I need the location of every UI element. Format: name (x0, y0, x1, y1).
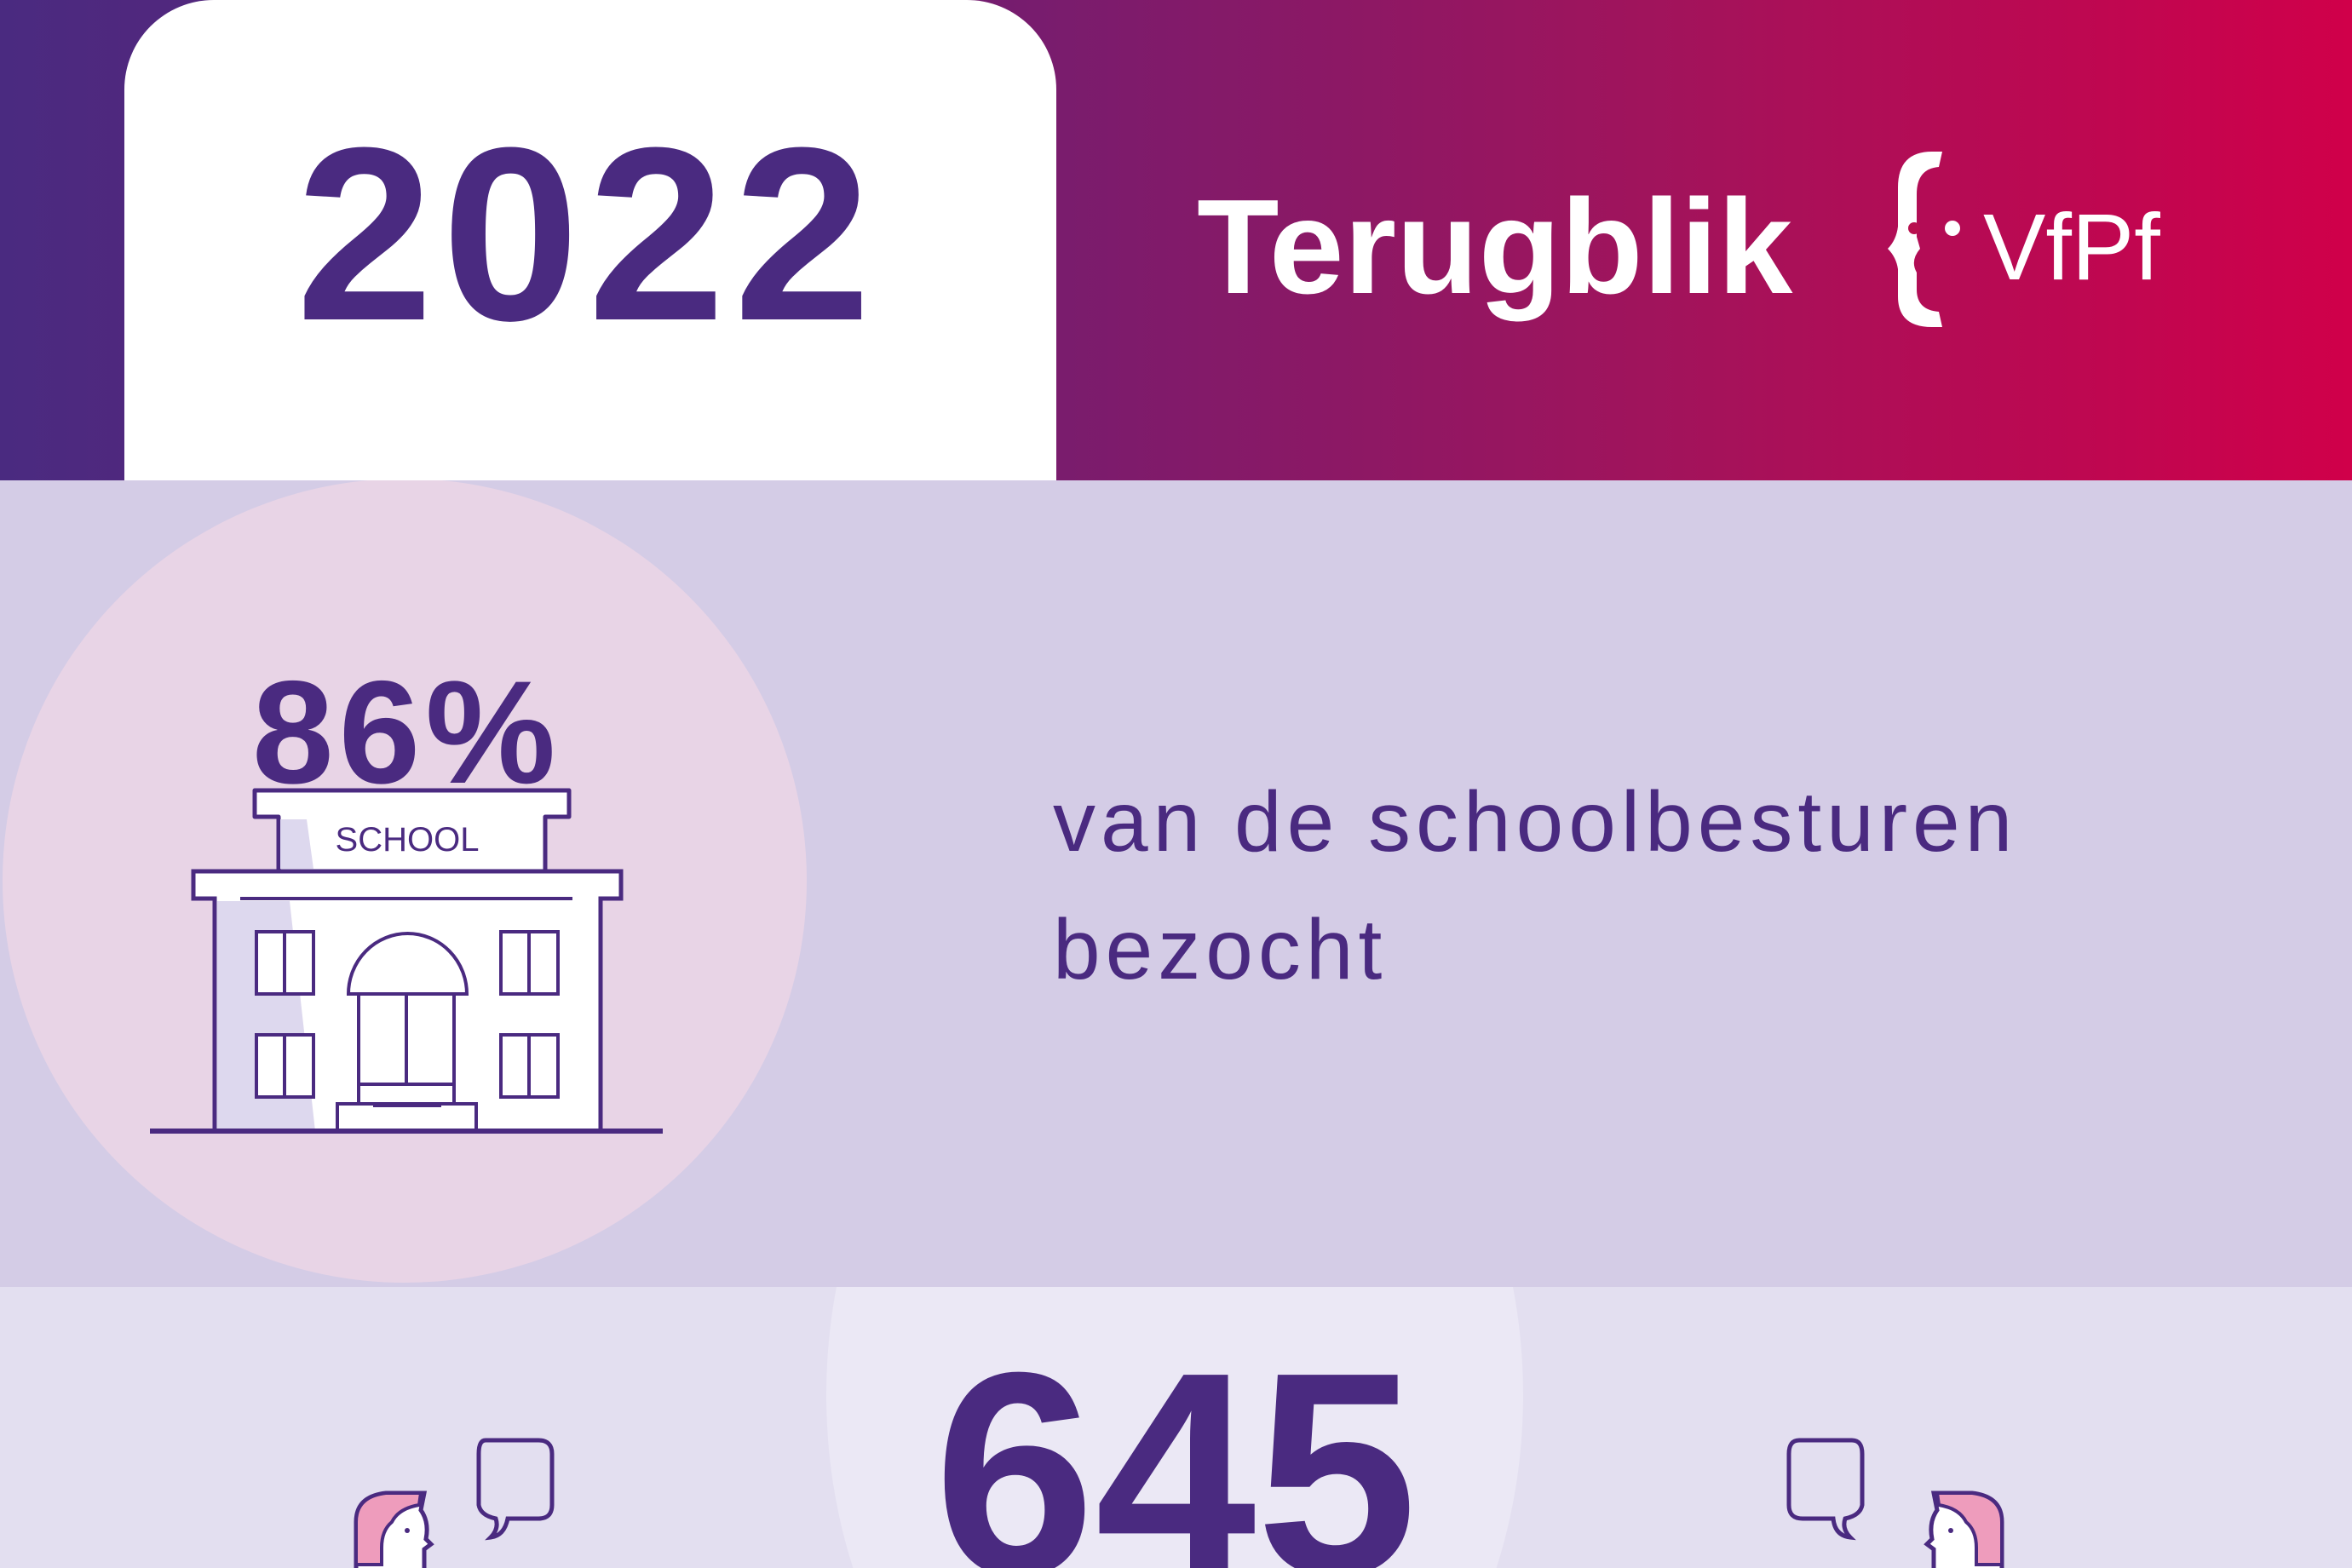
year: 2022 (296, 96, 880, 372)
stat: 86%: 86% (252, 651, 561, 814)
icon: right person (1924, 1490, 2004, 1568)
circle background (826, 945, 1523, 1568)
logo (1888, 152, 2160, 327)
circle background (3, 479, 807, 1283)
header band (0, 0, 2352, 480)
year card (124, 0, 1056, 480)
title: Terugblik (1197, 172, 1792, 322)
text: schoolbesturen bezocht (1053, 774, 2017, 997)
icon: school building (150, 789, 663, 1134)
text: schoolbesturen bezocht: van de schoolbesturen (1053, 774, 2017, 870)
panel: schools visited (0, 480, 2352, 1287)
icon: school building: SCHOOL (336, 821, 479, 859)
panel: 645 (0, 1287, 2352, 1568)
text: schoolbesturen bezocht: bezocht (1053, 902, 1387, 997)
icon: left speech bubble (477, 1438, 554, 1540)
logo: VfPf (1983, 195, 2160, 300)
icon: right speech bubble (1787, 1438, 1864, 1540)
icon: left person (354, 1490, 434, 1568)
